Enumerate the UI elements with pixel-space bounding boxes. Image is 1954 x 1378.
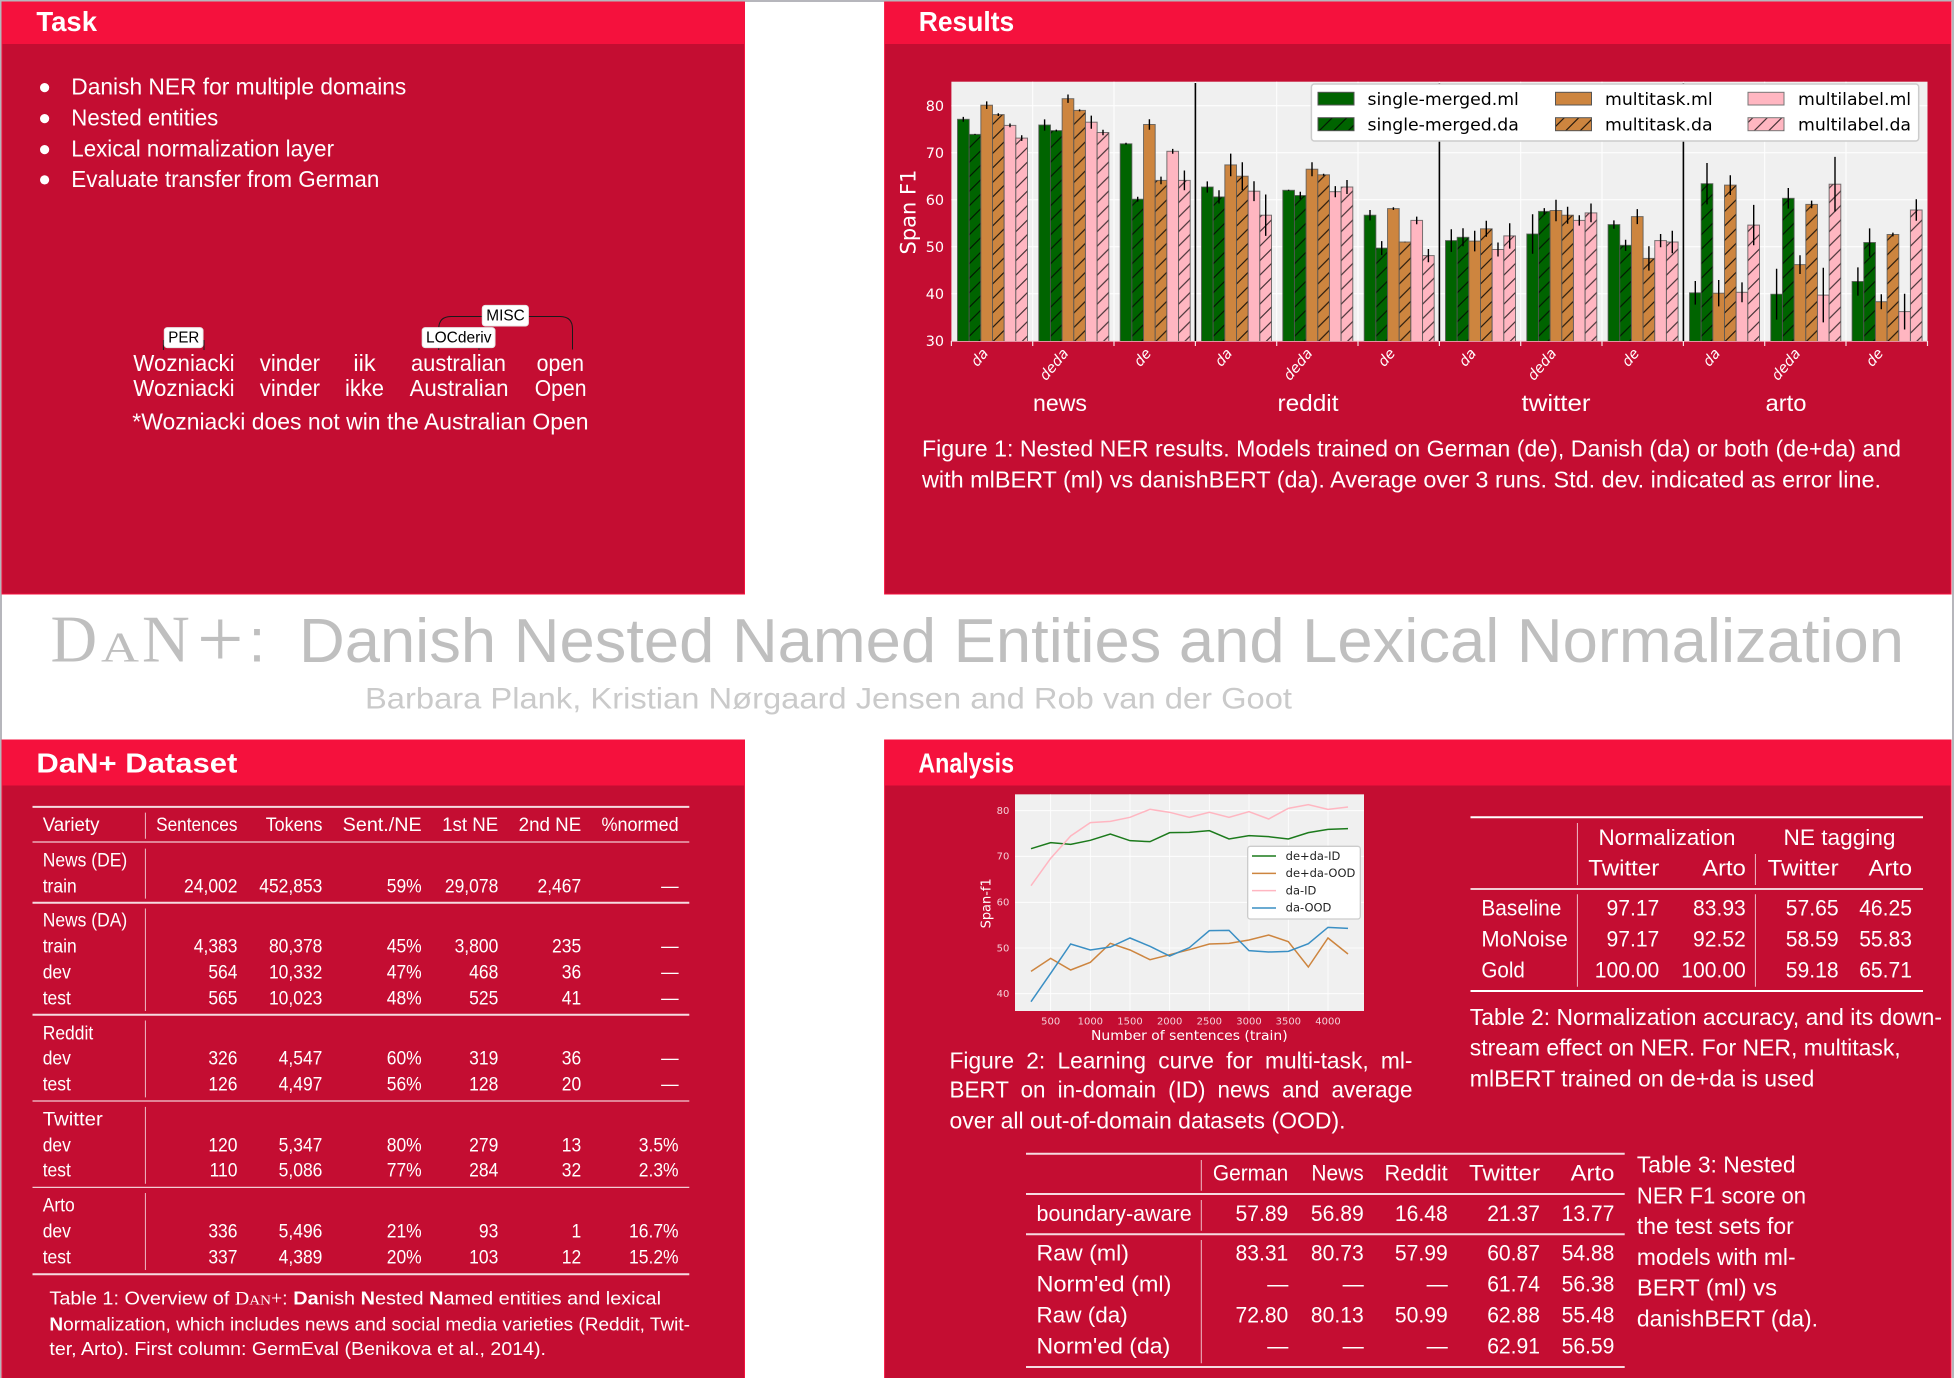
table 2 column: NE twitter <box>1768 855 1839 983</box>
table 3 column: German: 83.31 <box>1235 1240 1288 1266</box>
table 2 column: normalization arto: 92.52 <box>1693 926 1746 952</box>
table 3 column: Twitter: 61.74 <box>1487 1271 1540 1297</box>
line: de+da-OOD <box>1031 935 1348 971</box>
column: 1st NE: 284 <box>469 1159 498 1180</box>
bars <box>957 98 1923 341</box>
column: tokens: 5,496 <box>279 1220 322 1242</box>
panel: analysis <box>885 740 1951 1378</box>
title: D <box>50 603 97 677</box>
table 3 caption: the test sets for <box>1637 1213 1794 1239</box>
column: 2nd NE: 12 <box>562 1246 581 1268</box>
x tick labels: 1500 <box>1117 1016 1143 1027</box>
column: variety: test <box>43 987 71 1009</box>
table 3 column: German: — <box>1267 1333 1289 1358</box>
column: %normed: — <box>661 1047 679 1068</box>
panel header: task: Task <box>36 6 97 37</box>
x axis labels: de <box>1863 346 1887 370</box>
y tick labels: 40 <box>997 989 1009 1000</box>
table 3 column: Arto: Arto <box>1571 1160 1614 1186</box>
table 3 column: Arto: 54.88 <box>1562 1240 1614 1266</box>
table 3 caption: models with ml- <box>1637 1244 1796 1270</box>
y tick labels <box>997 806 1009 1000</box>
column: tokens: 4,547 <box>279 1047 322 1068</box>
column: sent./NE: 20% <box>387 1246 422 1268</box>
column: tokens: 80,378 <box>269 935 322 956</box>
table 2 column: normalization twitter: 100.00 <box>1595 957 1659 983</box>
domain separators <box>1195 83 1683 341</box>
table 2 column: normalization twitter: 97.17 <box>1606 926 1659 952</box>
x tick labels: 4000 <box>1315 1016 1341 1027</box>
column: sent./NE: 21% <box>387 1220 422 1242</box>
x axis labels: deda <box>1769 346 1804 384</box>
column: %normed: — <box>661 987 679 1009</box>
column: variety: News (DA) <box>43 909 127 930</box>
y axis title: Span F1 <box>897 170 921 254</box>
table 2 column: NE arto: 46.25 <box>1859 895 1912 921</box>
table 1: dataset overview <box>32 807 689 1274</box>
x axis labels: deda <box>1037 346 1072 384</box>
column: 1st NE: 525 <box>469 987 498 1009</box>
column: tokens: 5,086 <box>279 1159 322 1180</box>
table 3 column: German: German <box>1213 1160 1288 1186</box>
table 2 column: NE twitter: 57.65 <box>1786 895 1839 921</box>
x axis title: Number of sentences (train) <box>1091 1029 1288 1044</box>
column: 2nd NE: 2,467 <box>537 875 581 897</box>
axis ticks <box>951 341 1928 346</box>
column: sent./NE: 77% <box>387 1159 422 1180</box>
line chart: learning curve <box>980 794 1364 1044</box>
table 3 column: Twitter: Twitter <box>1469 1160 1540 1186</box>
column: %normed: 15.2% <box>629 1246 679 1268</box>
y axis labels: 30 <box>926 334 944 350</box>
chart legend: single-merged.da <box>1368 115 1519 135</box>
column: sentences: 120 <box>208 1134 238 1156</box>
table 2 column: normalization twitter: Twitter <box>1588 855 1659 881</box>
column: 2nd NE <box>519 814 581 1268</box>
table 3 column: News: 56.89 <box>1311 1201 1364 1226</box>
bullet list: Danish NER for multiple domains <box>71 74 406 100</box>
table 2 row labels: MoNoise <box>1481 926 1568 952</box>
title: N <box>142 603 190 677</box>
authors: Barbara Plank, Kristian Nørgaard Jensen and Rob van der Goot <box>365 682 1293 715</box>
column: sentences: 565 <box>208 987 238 1009</box>
column: sent./NE: 80% <box>387 1134 422 1156</box>
table 2 column: NE arto <box>1859 855 1912 983</box>
table 2 column: normalization arto <box>1681 855 1746 983</box>
column: 1st NE <box>442 814 498 1268</box>
figure 2 caption: over all out-of-domain datasets (OOD). <box>950 1107 1346 1133</box>
example sentence, normalized: Australian <box>410 375 508 401</box>
table 2 column: normalization arto: 100.00 <box>1681 957 1746 983</box>
y tick labels: 80 <box>997 806 1009 817</box>
column: 2nd NE: 36 <box>562 1047 581 1068</box>
column: 1st NE: 29,078 <box>445 875 498 897</box>
y tick labels: 50 <box>997 943 1009 954</box>
table 2 column: NE twitter: Twitter <box>1768 855 1839 881</box>
line: da-ID <box>1031 805 1348 886</box>
figure 1 caption: with mlBERT (ml) vs danishBERT (da). Average over 3 runs. Std. dev. indicated as error line. <box>921 467 1881 493</box>
table 2 row labels: Baseline <box>1481 895 1561 921</box>
table 1 caption <box>49 1287 690 1359</box>
column: 1st NE: 468 <box>469 961 498 982</box>
chart legend <box>1248 846 1360 919</box>
x axis labels: deda <box>1281 346 1316 384</box>
table 2 caption: stream effect on NER. For NER, multitask, <box>1470 1035 1901 1061</box>
table 3 column: News: — <box>1343 1271 1364 1297</box>
table 3 column: Twitter: 21.37 <box>1487 1201 1540 1226</box>
table 2 caption: mlBERT trained on de+da is used <box>1470 1066 1814 1092</box>
column: %normed: — <box>661 935 679 956</box>
line: da-OOD <box>1031 927 1348 1002</box>
table 2 caption: Table 2: Normalization accuracy, and its down- <box>1470 1004 1942 1030</box>
column: sentences: 564 <box>208 961 238 982</box>
table 3 column: Reddit: Reddit <box>1384 1160 1448 1186</box>
table 3 column: Arto: 55.48 <box>1562 1302 1614 1328</box>
table 3 column: German: 57.89 <box>1235 1201 1288 1226</box>
entity label: PER: PER <box>168 330 199 347</box>
y axis labels: 70 <box>926 146 944 162</box>
example sentence, raw <box>133 350 584 376</box>
table 2 column: NE twitter: 58.59 <box>1786 926 1839 952</box>
table 2 column: normalization twitter <box>1588 855 1659 983</box>
chart legend: de+da-OOD <box>1286 866 1356 880</box>
chart legend: multilabel.da <box>1798 115 1911 135</box>
table 3 column: News: 80.13 <box>1311 1302 1364 1328</box>
y axis title: Span-f1 <box>980 878 995 928</box>
table 3 row labels: boundary-aware <box>1036 1201 1192 1226</box>
table 2 caption <box>1470 1004 1942 1092</box>
column: 1st NE: 279 <box>469 1134 498 1156</box>
example sentence, raw: Wozniacki <box>133 350 235 376</box>
column: 1st NE: 319 <box>469 1047 498 1068</box>
chart legend: de+da-ID <box>1286 849 1341 863</box>
x tick labels: 2500 <box>1197 1016 1222 1027</box>
bar chart: span F1 <box>900 82 1928 380</box>
column: tokens: Tokens <box>266 814 322 835</box>
bullet list: Evaluate transfer from German <box>71 166 379 192</box>
column: %normed <box>602 814 679 1268</box>
example translation: *Wozniacki does not win the Australian Open <box>132 408 589 434</box>
y axis labels: 50 <box>926 240 944 256</box>
table 3 column: News: 80.73 <box>1311 1240 1364 1266</box>
example sentence, normalized <box>133 375 587 401</box>
column: variety <box>43 814 127 1268</box>
figure 1 caption <box>921 436 1901 493</box>
column: sentences: 337 <box>208 1246 238 1268</box>
table 3 column: German: — <box>1267 1271 1289 1297</box>
table 3 row labels <box>1036 1201 1192 1358</box>
panel header: analysis: Analysis <box>918 748 1014 779</box>
column: %normed: — <box>661 1073 679 1094</box>
panel: results <box>885 2 1951 594</box>
chart legend: multilabel.ml <box>1798 90 1911 110</box>
entity label: LOCderiv: LOCderiv <box>426 330 492 347</box>
x axis labels <box>968 346 1887 384</box>
chart legend: multitask.da <box>1605 115 1713 135</box>
table 2 column: NE arto: Arto <box>1869 855 1912 881</box>
table 3 column: Arto: 56.59 <box>1562 1333 1614 1358</box>
table 3 row labels: Norm'ed (ml) <box>1036 1271 1171 1297</box>
table 3 column: Reddit: — <box>1427 1271 1448 1297</box>
table 3 column: Reddit <box>1384 1160 1448 1358</box>
column: 1st NE: 128 <box>469 1073 498 1094</box>
domain group labels: arto <box>1766 390 1806 416</box>
x axis labels: da <box>1212 346 1236 370</box>
table 3: nested NER F1 <box>1026 1154 1625 1367</box>
table 3 column: Arto <box>1562 1160 1614 1358</box>
table 1 caption: Table 1: Overview of DAN+: Danish Nested Named entities and lexical <box>49 1287 661 1309</box>
title <box>50 593 1904 686</box>
example sentence, raw: iik <box>353 350 376 376</box>
panel header: results: Results <box>919 6 1014 37</box>
column: variety: train <box>43 935 77 956</box>
column: %normed: 16.7% <box>629 1220 679 1242</box>
figure 2 caption <box>950 1047 1412 1133</box>
column: sentences: 326 <box>208 1047 238 1068</box>
column: %normed: 2.3% <box>639 1159 679 1180</box>
table 3 column: Twitter: 62.91 <box>1487 1333 1540 1358</box>
column: %normed: 3.5% <box>639 1134 679 1156</box>
table 2 spanning headers: Normalization <box>1598 825 1736 850</box>
title: Danish Nested Named Entities and Lexical Normalization <box>299 607 1904 676</box>
table 3 row labels: Norm'ed (da) <box>1036 1333 1170 1358</box>
column: sentences: 336 <box>208 1220 238 1242</box>
table 3 caption: danishBERT (da). <box>1637 1306 1818 1332</box>
bullet list: Nested entities <box>71 104 218 130</box>
column: variety: News (DE) <box>43 849 127 871</box>
y axis labels: 80 <box>926 99 944 115</box>
column: variety: test <box>43 1159 71 1180</box>
table 2 spanning headers: NE tagging <box>1784 825 1896 850</box>
table 3 caption: BERT (ml) vs <box>1637 1275 1777 1301</box>
table 2 row labels <box>1481 895 1568 983</box>
column: sentences: Sentences <box>156 814 238 835</box>
column: variety: train <box>43 875 77 897</box>
panel header: results <box>885 2 1951 44</box>
figure 2 caption: Figure 2: Learning curve for multi-task, ml- <box>950 1047 1412 1073</box>
panel header: dataset: DaN+ Dataset <box>36 748 237 779</box>
column: %normed: %normed <box>602 814 679 835</box>
column: sentences: 4,383 <box>194 935 238 956</box>
column: 2nd NE: 235 <box>552 935 581 956</box>
column: 1st NE: 93 <box>479 1220 498 1242</box>
title: : <box>248 607 265 675</box>
x tick labels: 3500 <box>1276 1016 1301 1027</box>
table 3 column: Reddit: 16.48 <box>1395 1201 1448 1226</box>
column: 2nd NE: 36 <box>562 961 581 982</box>
column: sentences: 110 <box>210 1159 238 1180</box>
panel header: task <box>2 2 744 44</box>
title: + <box>197 593 244 686</box>
x tick labels <box>1041 1016 1341 1027</box>
table 3 column: News <box>1311 1160 1364 1358</box>
table 3 caption <box>1637 1152 1818 1332</box>
column: sent./NE: 59% <box>387 875 422 897</box>
domain group labels: news <box>1033 390 1087 416</box>
x tick labels: 2000 <box>1157 1016 1182 1027</box>
example sentence, normalized: vinder <box>260 375 320 401</box>
column: variety: Twitter <box>43 1108 103 1130</box>
column: variety: dev <box>43 1220 72 1242</box>
table 3 column: German: 72.80 <box>1235 1302 1288 1328</box>
figure 1 caption: Figure 1: Nested NER results. Models trained on German (de), Danish (da) or both (de+da) and <box>922 436 1901 462</box>
x axis labels: deda <box>1525 346 1560 384</box>
y axis labels <box>926 99 944 350</box>
table 3 row labels: Raw (ml) <box>1036 1240 1129 1266</box>
x axis labels: da <box>968 346 992 370</box>
chart legend: da-OOD <box>1286 901 1332 915</box>
column: sentences <box>156 814 238 1268</box>
example sentence, raw: vinder <box>260 350 320 376</box>
column: 1st NE: 103 <box>469 1246 498 1268</box>
chart legend <box>1311 84 1919 141</box>
entity label: MISC: MISC <box>486 308 525 325</box>
column: 2nd NE: 2nd NE <box>519 814 581 835</box>
table 3 caption: NER F1 score on <box>1637 1182 1806 1208</box>
x axis labels: de <box>1619 346 1643 370</box>
table 2 column: normalization arto: Arto <box>1702 855 1746 881</box>
domain group labels <box>1033 390 1806 416</box>
x tick labels: 500 <box>1041 1016 1060 1027</box>
domain group labels: reddit <box>1278 390 1339 416</box>
x axis labels: de <box>1131 346 1155 370</box>
table 2 column: NE arto: 65.71 <box>1859 957 1912 983</box>
column: sent./NE: Sent./NE <box>343 814 422 835</box>
column: tokens: 5,347 <box>279 1134 322 1156</box>
column: sent./NE: 47% <box>387 961 422 982</box>
table 2 row labels: Gold <box>1481 957 1525 983</box>
table 3 column: Reddit: 57.99 <box>1395 1240 1448 1266</box>
table 3 column: Twitter: 60.87 <box>1487 1240 1540 1266</box>
column: 2nd NE: 1 <box>571 1220 581 1242</box>
column: tokens <box>259 814 322 1268</box>
x axis labels: de <box>1375 346 1399 370</box>
table 3 column: Arto: 56.38 <box>1562 1271 1614 1297</box>
table 2 column: NE twitter: 59.18 <box>1786 957 1839 983</box>
chart legend: multitask.ml <box>1605 90 1713 110</box>
column: 2nd NE: 41 <box>562 987 581 1009</box>
table 1 caption: ter, Arto). First column: GermEval (Benikova et al., 2014). <box>49 1338 546 1359</box>
table 1 caption: Normalization, which includes news and social media varieties (Reddit, Twit- <box>49 1313 690 1334</box>
column: sent./NE: 48% <box>387 987 422 1009</box>
column: sent./NE <box>343 814 422 1268</box>
nested entity diagram <box>132 305 589 434</box>
x axis labels: da <box>1700 346 1724 370</box>
bullet list <box>40 74 406 192</box>
title: A <box>101 626 140 672</box>
panel header: analysis <box>885 740 1951 786</box>
column: %normed: — <box>661 875 679 897</box>
column: 1st NE: 1st NE <box>442 814 498 835</box>
table 3 column: Reddit: — <box>1427 1333 1448 1358</box>
table 3 column: Arto: 13.77 <box>1562 1201 1614 1226</box>
y tick labels: 60 <box>997 898 1009 909</box>
y tick labels: 70 <box>997 852 1009 863</box>
column: variety: dev <box>43 1134 72 1156</box>
table 2 spanning headers <box>1598 825 1896 850</box>
column: variety: Variety <box>43 814 100 835</box>
panel header: dataset <box>2 740 744 786</box>
column: %normed: — <box>661 961 679 982</box>
column: sentences: 126 <box>208 1073 238 1094</box>
table 3 row labels: Raw (da) <box>1036 1302 1128 1328</box>
column: tokens: 4,497 <box>279 1073 322 1094</box>
bullet list: Lexical normalization layer <box>71 136 334 162</box>
example sentence, normalized: Wozniacki <box>133 375 235 401</box>
example sentence, raw: australian <box>411 350 506 376</box>
column: 2nd NE: 13 <box>562 1134 581 1156</box>
table 2 column: normalization twitter: 97.17 <box>1606 895 1659 921</box>
y axis labels: 40 <box>926 287 944 303</box>
x tick labels: 3000 <box>1236 1016 1262 1027</box>
table 3 column: Reddit: 50.99 <box>1395 1302 1448 1328</box>
line: de+da-ID <box>1031 829 1348 849</box>
table 3 column: Twitter <box>1469 1160 1540 1358</box>
example sentence, normalized: ikke <box>345 375 384 401</box>
column: 2nd NE: 20 <box>562 1073 581 1094</box>
column: variety: dev <box>43 961 72 982</box>
column: sent./NE: 45% <box>387 935 422 956</box>
entity label: MISC <box>482 305 528 326</box>
column: variety: Arto <box>43 1194 75 1216</box>
column: variety: dev <box>43 1047 72 1068</box>
column: tokens: 10,332 <box>269 961 322 982</box>
panel: dan+ dataset <box>2 740 744 1378</box>
example sentence, raw: open <box>537 350 584 376</box>
column: tokens: 4,389 <box>279 1246 322 1268</box>
column: 2nd NE: 32 <box>562 1159 581 1180</box>
chart legend: da-ID <box>1286 883 1317 897</box>
table 2 column: normalization arto: 83.93 <box>1693 895 1746 921</box>
table 3 column: News: News <box>1311 1160 1364 1186</box>
column: sent./NE: 60% <box>387 1047 422 1068</box>
column: variety: Reddit <box>43 1022 93 1044</box>
column: sentences: 24,002 <box>184 875 238 897</box>
column: variety: test <box>43 1246 71 1268</box>
chart legend: single-merged.ml <box>1368 90 1519 110</box>
figure 2 caption: BERT on in-domain (ID) news and average <box>950 1077 1412 1103</box>
error lines <box>963 94 1916 330</box>
y axis labels: 60 <box>926 193 944 209</box>
domain group labels: twitter <box>1522 390 1591 416</box>
table 3 caption: Table 3: Nested <box>1637 1152 1796 1178</box>
table 3 column: German <box>1213 1160 1289 1358</box>
table 3 column: News: — <box>1343 1333 1364 1358</box>
x tick labels: 1000 <box>1078 1016 1103 1027</box>
x axis labels: da <box>1456 346 1480 370</box>
column: sent./NE: 56% <box>387 1073 422 1094</box>
table 2 column: NE arto: 55.83 <box>1859 926 1912 952</box>
column: tokens: 452,853 <box>259 875 322 897</box>
table 3 column: Twitter: 62.88 <box>1487 1302 1540 1328</box>
column: tokens: 10,023 <box>269 987 322 1009</box>
column: 1st NE: 3,800 <box>455 935 498 956</box>
example sentence, normalized: Open <box>535 375 586 401</box>
table 2: normalization accuracy <box>1470 817 1923 991</box>
column: variety: test <box>43 1073 71 1094</box>
